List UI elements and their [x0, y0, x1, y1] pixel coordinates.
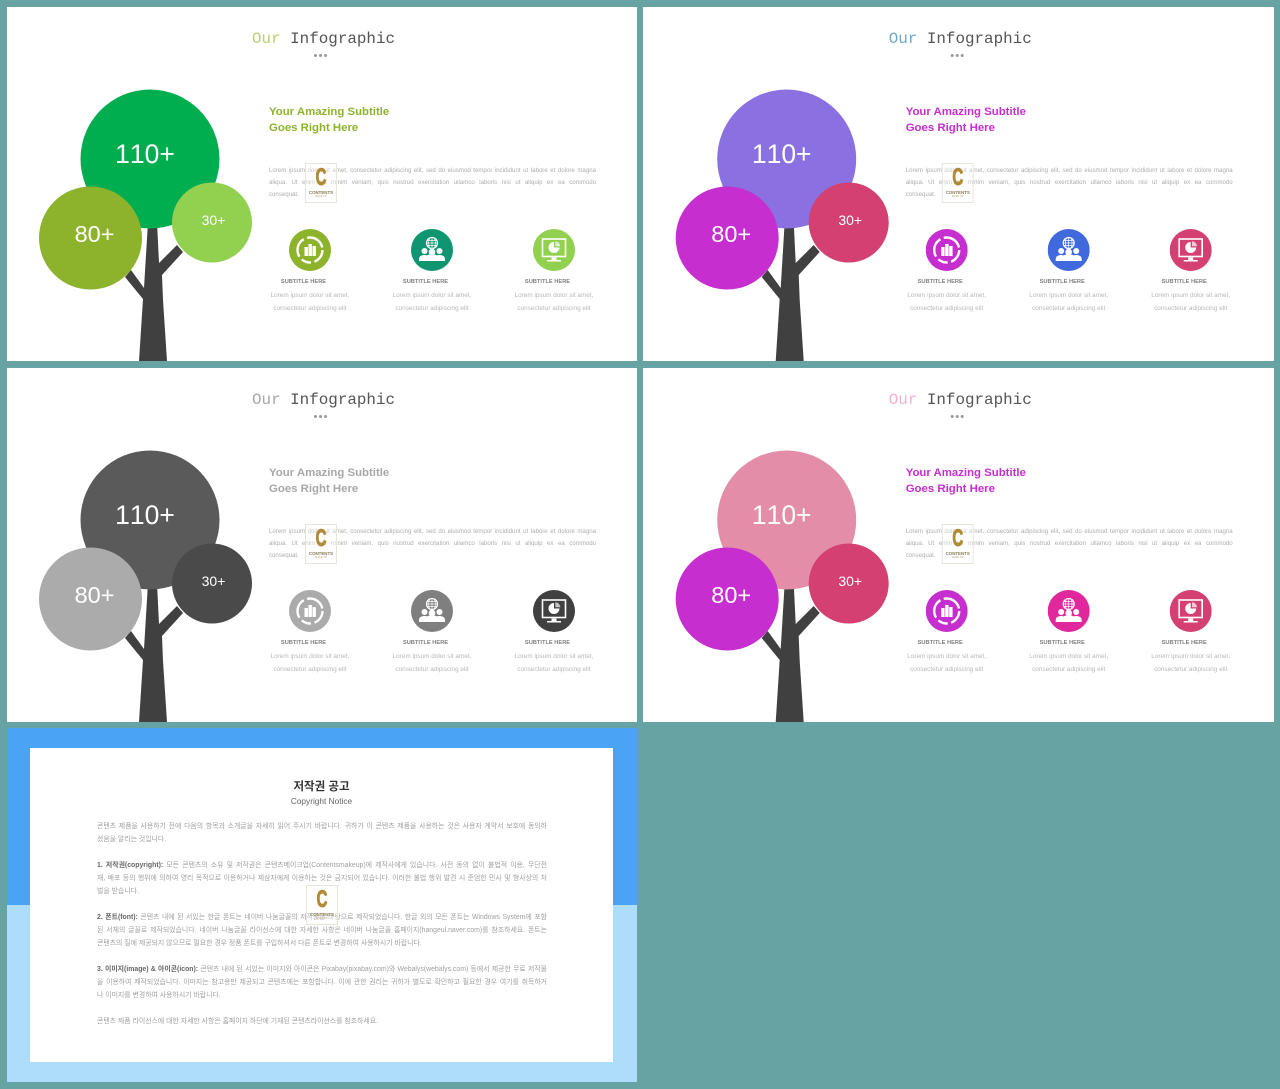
tree chart	[676, 450, 889, 722]
feature item 3	[1151, 590, 1230, 672]
panel: green tree slide	[7, 7, 637, 361]
circle: 30+: 30+	[202, 573, 225, 589]
body text	[906, 528, 1233, 559]
watermark logo: C	[316, 164, 326, 191]
subtitle heading: Your Amazing Subtitle	[906, 106, 1026, 118]
feature item 1	[907, 229, 986, 312]
title dots	[950, 415, 964, 418]
circle: 80+	[676, 548, 779, 650]
title dots	[314, 54, 327, 57]
subtitle heading: Your Amazing Subtitle	[906, 467, 1026, 479]
body text: consequat.	[906, 552, 936, 559]
feature item 3: consectetur adipiscing elit	[517, 666, 591, 672]
watermark logo: CONTENTS	[946, 190, 970, 195]
circle: 110+: 110+	[752, 500, 812, 530]
subtitle heading	[269, 467, 389, 495]
watermark logo: C	[952, 525, 963, 552]
feature item 3: Lorem ipsum dolor sit amet,	[1151, 653, 1230, 660]
watermark logo	[942, 524, 974, 564]
feature item 2	[1029, 590, 1108, 672]
watermark logo: MAKE UP	[952, 556, 964, 559]
watermark logo: C	[316, 525, 326, 552]
body text: aliqua. Ut enim ad minim veniam, quis nostrud exercitation ullamco laboris nisi ut aliquip ex ea commodo	[269, 540, 596, 547]
watermark logo: C	[952, 164, 963, 191]
subtitle heading: Goes Right Here	[906, 483, 995, 495]
tree trunk	[125, 583, 183, 722]
section 3: image and icon: 나 이미지를 변경하여 사용하시기 바랍니다.	[97, 992, 221, 999]
feature item 2: consectetur adipiscing elit	[1032, 666, 1105, 672]
title: Our Infographic	[889, 390, 1032, 408]
tree chart	[676, 90, 889, 361]
tree chart	[39, 450, 252, 722]
feature item 1	[271, 229, 349, 312]
feature item 3: consectetur adipiscing elit	[517, 304, 591, 312]
intro text: 콘텐츠 제품을 사용하기 전에 다음의 항목과 소개글을 자세히 읽어 주시기 바랍니다. 귀하가 이 콘텐츠 제품을 사용하는 것은 사용자 계약서 보호에 동의하	[97, 823, 547, 830]
feature item 3: Lorem ipsum dolor sit amet,	[515, 292, 593, 299]
feature item 3	[1151, 229, 1230, 312]
feature item 3: Lorem ipsum dolor sit amet,	[515, 653, 593, 660]
watermark logo	[942, 163, 974, 203]
watermark logo	[305, 524, 337, 564]
body text: Lorem ipsum dolor sit amet, consectetur adipiscing elit, sed do eiusmod tempor incididunt ut labore et dolore magna	[906, 167, 1233, 174]
feature item 2: SUBTITLE HERE	[1040, 279, 1085, 285]
feature item 1: SUBTITLE HERE	[918, 279, 963, 285]
watermark logo: CONTENTS	[310, 912, 334, 917]
feature item 2: SUBTITLE HERE	[403, 279, 448, 285]
feature item 1: Lorem ipsum dolor sit amet,	[907, 292, 986, 299]
panel: copyright notice	[7, 728, 637, 1082]
subtitle heading: Your Amazing Subtitle	[269, 467, 389, 479]
subtitle heading	[269, 106, 389, 134]
section 3: image and icon	[97, 965, 547, 999]
circle: 110+	[717, 450, 856, 590]
body text	[269, 528, 596, 559]
circle: 110+	[80, 450, 220, 590]
title: Our Infographic	[252, 30, 395, 48]
notice subheading: Copyright Notice	[291, 796, 352, 806]
circle: 80+	[39, 186, 142, 290]
watermark logo	[306, 885, 338, 925]
feature item 3: Lorem ipsum dolor sit amet,	[1151, 292, 1230, 299]
circle: 110+	[80, 90, 220, 228]
circle: 80+	[39, 548, 142, 650]
feature item 3: SUBTITLE HERE	[1162, 640, 1207, 646]
watermark logo	[305, 163, 337, 203]
circle: 110+: 110+	[752, 139, 812, 169]
watermark logo: CONTENTS	[309, 551, 333, 556]
title: Our Infographic	[889, 30, 1032, 48]
panel: purple tree slide	[643, 7, 1274, 361]
feature item 2: Lorem ipsum dolor sit amet,	[393, 292, 471, 299]
feature item 1: consectetur adipiscing elit	[910, 304, 983, 312]
tree trunk	[762, 222, 820, 361]
feature item 1	[907, 590, 986, 672]
feature item 1: consectetur adipiscing elit	[910, 666, 983, 672]
body text: aliqua. Ut enim ad minim veniam, quis nostrud exercitation ullamco laboris nisi ut aliquip ex ea commodo	[906, 179, 1233, 186]
feature item 1: SUBTITLE HERE	[281, 640, 326, 646]
feature item 2: Lorem ipsum dolor sit amet,	[1029, 292, 1108, 299]
body text: aliqua. Ut enim ad minim veniam, quis nostrud exercitation ullamco laboris nisi ut aliquip ex ea commodo	[269, 179, 596, 186]
subtitle heading	[906, 106, 1026, 134]
body text	[269, 167, 596, 198]
feature item 3	[515, 229, 593, 312]
circle: 30+	[809, 182, 889, 262]
feature item 3: SUBTITLE HERE	[525, 640, 570, 646]
feature item 1	[271, 590, 349, 672]
feature item 2: Lorem ipsum dolor sit amet,	[393, 653, 471, 660]
title dots	[950, 54, 964, 57]
feature item 2: consectetur adipiscing elit	[1032, 304, 1105, 312]
circle: 80+	[676, 186, 779, 290]
feature item 1: consectetur adipiscing elit	[273, 666, 347, 672]
feature item 2	[393, 229, 471, 312]
feature item 2: SUBTITLE HERE	[1040, 640, 1085, 646]
watermark logo: MAKE UP	[952, 195, 964, 198]
feature item 3: consectetur adipiscing elit	[1154, 666, 1227, 672]
section 1: copyright: 벌을 받습니다.	[97, 888, 139, 895]
body text: consequat.	[269, 552, 299, 559]
body text: Lorem ipsum dolor sit amet, consectetur adipiscing elit, sed do eiusmod tempor incididunt ut labore et dolore magna	[269, 528, 596, 535]
feature item 2	[393, 590, 471, 672]
tree trunk	[125, 222, 183, 361]
intro text: 셨음을 알리는 것입니다.	[97, 836, 166, 843]
feature item 3: SUBTITLE HERE	[1162, 279, 1207, 285]
section 3: image and icon: 을 이용하여 제작되었습니다. 이미지는 참고용만 제공되고 콘텐츠에는 포함합니다. 이에 관한 권리는 귀하가 별도로 확인하고 필요한 경우 여기를 취득하거	[97, 979, 547, 986]
circle: 110+	[717, 90, 856, 228]
body text: consequat.	[906, 191, 936, 198]
watermark logo: CONTENTS	[946, 551, 970, 556]
feature item 3	[515, 590, 593, 672]
body text: Lorem ipsum dolor sit amet, consectetur adipiscing elit, sed do eiusmod tempor incididunt ut labore et dolore magna	[269, 167, 596, 174]
circle: 30+: 30+	[838, 212, 862, 228]
section 1: copyright: 재, 배포 등의 행위에 의하여 영리 목적으로 이용하거나 제삼자에게 이용하는 것은 금지되어 있습니다. 이러한 불법 행위 발견 시 준엄한 민사 및 형사상의 처	[97, 875, 547, 882]
notice card	[30, 748, 613, 1062]
feature item 2: consectetur adipiscing elit	[395, 666, 469, 672]
feature item 1: Lorem ipsum dolor sit amet,	[271, 653, 349, 660]
watermark logo: MAKE UP	[316, 917, 328, 920]
subtitle heading: Goes Right Here	[269, 122, 358, 134]
tree chart	[39, 90, 252, 361]
body text: consequat.	[269, 191, 299, 198]
circle: 80+: 80+	[75, 221, 114, 247]
section 1: copyright	[97, 861, 547, 895]
closing line: 콘텐츠 제품 라이선스에 대한 자세한 사항은 홈페이지 하단에 기재된 콘텐츠라이선스를 참조하세요.	[97, 1018, 378, 1025]
watermark logo: MAKE UP	[315, 195, 327, 198]
circle: 80+: 80+	[711, 221, 751, 247]
title dots	[314, 415, 327, 418]
circle: 30+: 30+	[838, 573, 862, 589]
circle: 30+: 30+	[202, 212, 225, 228]
circle: 80+: 80+	[711, 582, 751, 608]
circle: 30+	[172, 182, 252, 262]
notice heading: 저작권 공고	[293, 781, 350, 793]
feature item 3: consectetur adipiscing elit	[1154, 304, 1227, 312]
subtitle heading: Goes Right Here	[906, 122, 995, 134]
subtitle heading: Goes Right Here	[269, 483, 358, 495]
panel: grey tree slide	[7, 368, 637, 722]
body text: Lorem ipsum dolor sit amet, consectetur adipiscing elit, sed do eiusmod tempor incididunt ut labore et dolore magna	[906, 528, 1233, 535]
panel: pink tree slide	[643, 368, 1274, 722]
feature item 2: Lorem ipsum dolor sit amet,	[1029, 653, 1108, 660]
section 1: copyright: 1. 저작권(copyright): 모든 콘텐츠의 소유 및 저작권은 콘텐츠메이크업(Contentsmakeup)에 제작사에게 있습니다. 사전 동의 없이 불법적 이용, 무단전	[97, 862, 547, 869]
body text: aliqua. Ut enim ad minim veniam, quis nostrud exercitation ullamco laboris nisi ut aliquip ex ea commodo	[906, 540, 1233, 547]
section 2: font: 된 서체의 글꼴로 제작되었습니다. 네이버 나눔글꼴 라이선스에 대한 자세한 사항은 네이버 나눔글꼴 홈페이지(hangeul.naver.com)를 참조하세요. 폰트는	[97, 927, 547, 934]
circle: 80+: 80+	[75, 582, 114, 608]
feature item 2: SUBTITLE HERE	[403, 640, 448, 646]
feature item 1: Lorem ipsum dolor sit amet,	[907, 653, 986, 660]
subtitle heading	[906, 467, 1026, 495]
watermark logo: C	[317, 886, 327, 913]
feature item 1: consectetur adipiscing elit	[273, 304, 347, 312]
circle: 30+	[809, 544, 889, 624]
section 2: font: 콘텐츠의 질에 제공되지 않으므로 필요한 경우 정품 폰트를 구입하셔서 다른 폰트로 변경하여 사용하시기 바랍니다.	[97, 940, 422, 947]
feature item 1: SUBTITLE HERE	[918, 640, 963, 646]
feature item 1: SUBTITLE HERE	[281, 279, 326, 285]
title: Our Infographic	[252, 390, 395, 408]
watermark logo: CONTENTS	[309, 190, 333, 195]
section 3: image and icon: 3. 이미지(image) & 아이콘(icon): 콘텐츠 내에 된 서있는 이미지와 아이콘은 Pixabay(pixabay.com)와 Webalys(webalys.com) 등에서 제공한 무료 저작물	[97, 966, 547, 973]
body text	[906, 167, 1233, 198]
watermark logo: MAKE UP	[315, 556, 327, 559]
tree trunk	[762, 583, 820, 722]
subtitle heading: Your Amazing Subtitle	[269, 106, 389, 118]
circle: 30+	[172, 544, 252, 624]
section 2: font	[97, 913, 547, 947]
feature item 3: SUBTITLE HERE	[525, 279, 570, 285]
circle: 110+: 110+	[115, 139, 175, 169]
section 2: font: 2. 폰트(font): 콘텐츠 내에 된 서있는 한글 폰트는 네이버 나눔글꼴의 저작물을 바탕으로 제작되었습니다. 한글 외의 모든 폰트는 Windows System에 포함	[97, 914, 547, 921]
intro text	[97, 822, 547, 843]
circle: 110+: 110+	[115, 500, 175, 530]
feature item 2: consectetur adipiscing elit	[395, 304, 469, 312]
feature item 2	[1029, 229, 1108, 312]
feature item 1: Lorem ipsum dolor sit amet,	[271, 292, 349, 299]
